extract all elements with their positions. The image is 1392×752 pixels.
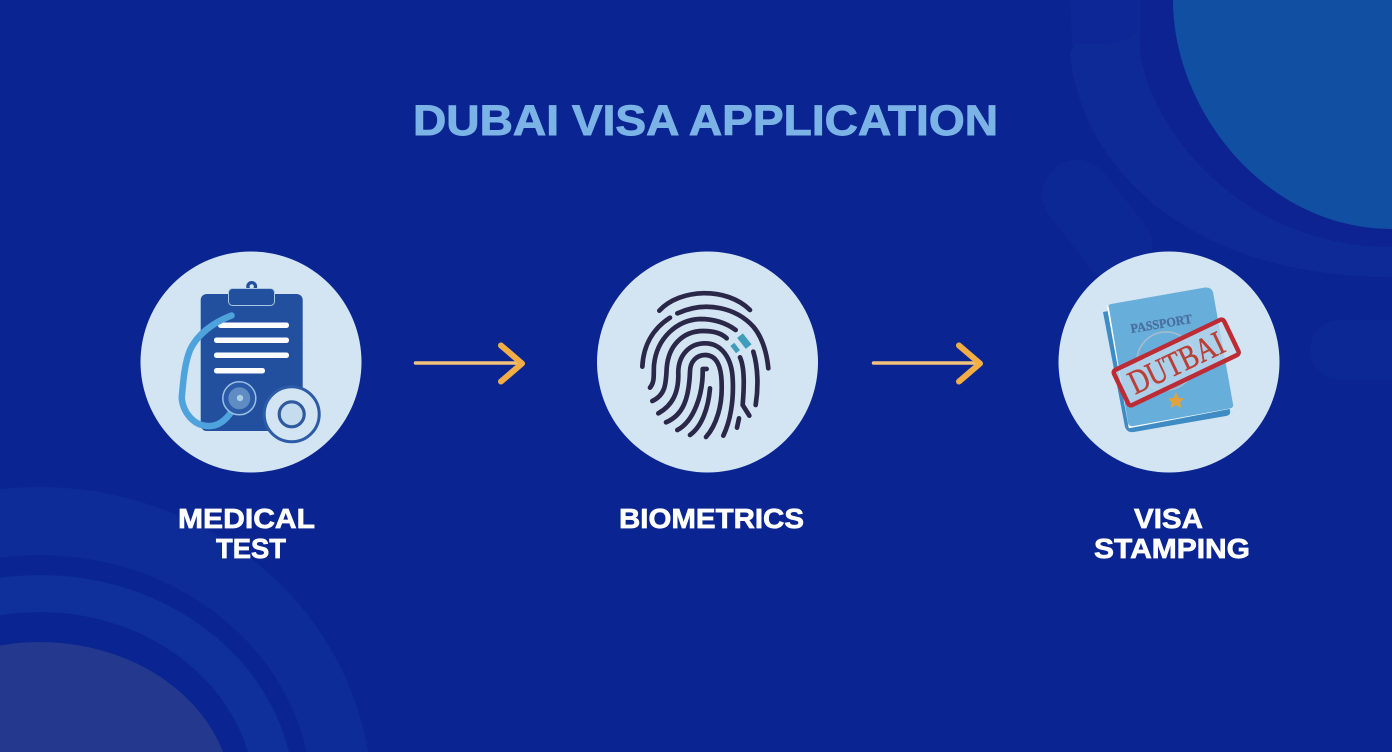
icon: dubai stamp: DUTBAI xyxy=(1123,325,1231,402)
icon circle: medical xyxy=(140,252,362,472)
label: visa stamping xyxy=(1094,503,1250,564)
icon: clipboard xyxy=(201,281,303,431)
icon: passport xyxy=(1103,287,1233,432)
decoration: top-right circles xyxy=(1028,0,1392,380)
label: medical test: MEDICAL xyxy=(178,503,315,534)
label: visa stamping: STAMPING xyxy=(1094,533,1250,564)
arrow: medical to biometrics xyxy=(416,346,522,382)
icon: passport: PASSPORT xyxy=(1129,311,1193,336)
arrow: biometrics to visa stamping xyxy=(874,346,980,382)
icon: star xyxy=(1168,392,1184,408)
step 3: visa stamping xyxy=(1058,252,1280,564)
label: medical test xyxy=(178,503,315,564)
icon circle: passport xyxy=(1058,252,1280,472)
icon circle: fingerprint xyxy=(597,252,818,472)
title: DUBAI VISA APPLICATION xyxy=(413,97,998,145)
label: medical test: TEST xyxy=(216,533,286,564)
icon: stethoscope xyxy=(182,316,319,442)
step 1: medical test xyxy=(140,252,362,564)
label: visa stamping: VISA xyxy=(1134,503,1203,534)
decoration: bottom-left circles xyxy=(0,487,368,752)
label: biometrics: BIOMETRICS xyxy=(619,503,804,534)
icon: fingerprint xyxy=(642,293,768,437)
step 2: biometrics xyxy=(597,252,818,534)
